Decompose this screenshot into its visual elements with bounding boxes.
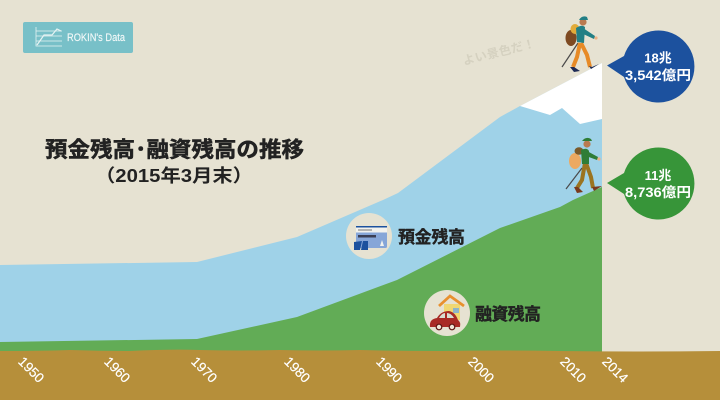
torso [576, 26, 585, 43]
trekking pole [566, 168, 582, 189]
callout value: 11兆 [645, 168, 671, 183]
arm [586, 151, 598, 160]
torso [581, 149, 589, 164]
axis: year labels [15, 354, 631, 386]
backpack [569, 153, 581, 169]
subtitle: （2015年3月末） [95, 165, 253, 186]
ground band [0, 350, 720, 400]
arm [581, 28, 595, 39]
shoes [570, 64, 599, 72]
callout: loan total: 8,736億円 [625, 184, 691, 200]
callout: deposit total [607, 31, 694, 103]
axis: year labels: 2010 [557, 354, 589, 386]
hiker: upper, deposits [562, 16, 599, 72]
axis: year labels: 1990 [373, 354, 405, 386]
area: loan balance [0, 187, 602, 353]
axis: year labels: 1960 [101, 354, 133, 386]
legs [577, 163, 585, 188]
cap [579, 16, 588, 20]
icon: house and car [424, 290, 470, 336]
axis: year labels: 1970 [188, 354, 220, 386]
icon: bankbook [346, 213, 392, 259]
label: loan balance: 融資残高 [475, 304, 541, 324]
chart: deposit and loan area mountain [0, 63, 602, 353]
head [579, 18, 587, 26]
icon: mini line chart [36, 27, 62, 46]
callout value: 18兆 [644, 50, 672, 66]
axis: year labels: 2000 [465, 354, 497, 386]
title: 預金残高･融資残高の推移 [45, 138, 304, 162]
callout: loan total [607, 148, 694, 220]
head [583, 140, 591, 148]
badge label: ROKIN's Data [67, 32, 126, 44]
label: deposit balance: 預金残高 [398, 227, 465, 247]
axis: year labels: 2014 [599, 354, 631, 386]
legs [573, 43, 580, 67]
cap [582, 138, 592, 141]
callout: deposit total: 3,542億円 [625, 67, 691, 83]
area: deposit balance [0, 63, 602, 353]
backpack [566, 30, 576, 46]
axis: year labels: 1950 [15, 354, 47, 386]
logo badge [23, 22, 133, 53]
trekking pole [562, 43, 578, 67]
shoes [574, 186, 602, 193]
axis: year labels: 1980 [281, 354, 313, 386]
speech: faint remark: よい景色だ！ [461, 35, 537, 68]
hiker: lower, loans [566, 138, 602, 193]
area: snow cap [520, 63, 602, 124]
